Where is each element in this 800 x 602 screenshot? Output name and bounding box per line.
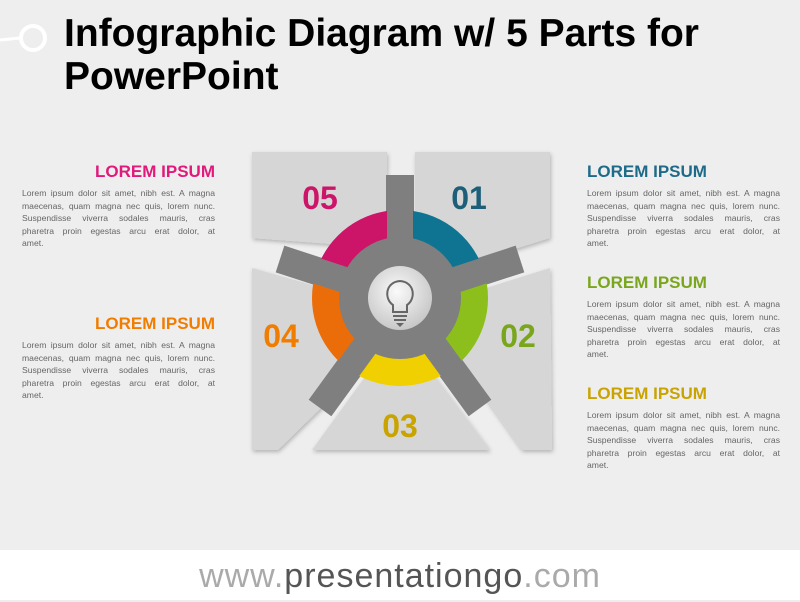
text block: 05: Lorem ipsum dolor sit amet, nibh est. A magna: [22, 188, 215, 198]
footer: www.presentationgo.com: [199, 557, 601, 595]
spokes over ring: [305, 200, 495, 379]
text block: 03: maecenas, quam magna nec quis, lorem nunc.: [587, 423, 780, 433]
text block: 01: Suspendisse viverra sodales mauris, cras: [587, 213, 780, 223]
text block: 05: LOREM IPSUM: [95, 162, 215, 181]
numbers: 05: [302, 180, 338, 216]
text block: 02: Suspendisse viverra sodales mauris, cras: [587, 324, 780, 334]
title: [0, 12, 699, 98]
text block: 05: [22, 162, 215, 248]
text block: 04: maecenas, quam magna nec quis, lorem nunc.: [22, 353, 215, 363]
text block: 03: Lorem ipsum dolor sit amet, nibh est. A magna: [587, 410, 780, 420]
title: Infographic Diagram w/ 5 Parts for: [64, 12, 699, 55]
text block: 02: Lorem ipsum dolor sit amet, nibh est. A magna: [587, 299, 780, 309]
numbers: 02: [500, 318, 536, 354]
text block: 05: maecenas, quam magna nec quis, lorem nunc.: [22, 201, 215, 211]
text block: 02: maecenas, quam magna nec quis, lorem nunc.: [587, 312, 780, 322]
numbers: [263, 180, 536, 444]
text block: 03: Suspendisse viverra sodales mauris, cras: [587, 435, 780, 445]
text block: 04: pharetra proin egestas arcu erat dolor, at: [22, 378, 215, 388]
text block: 05: Suspendisse viverra sodales mauris, cras: [22, 213, 215, 223]
text block: 04: amet.: [22, 390, 44, 400]
text block: 04: LOREM IPSUM: [95, 314, 215, 333]
text block: 04: [22, 314, 215, 400]
numbers: 04: [263, 318, 299, 354]
text block: 02: LOREM IPSUM: [587, 273, 707, 292]
panels: [252, 152, 552, 450]
text block: 02: amet.: [587, 349, 608, 359]
text block: 01: pharetra proin egestas arcu erat dolor, at: [587, 226, 780, 236]
text block: 01: [587, 162, 780, 248]
text block: 01: Lorem ipsum dolor sit amet, nibh est. A magna: [587, 188, 780, 198]
text block: 01: amet.: [587, 238, 608, 248]
title: PowerPoint: [64, 55, 279, 98]
text block: 02: [587, 273, 780, 359]
text block: 01: maecenas, quam magna nec quis, lorem nunc.: [587, 201, 780, 211]
text block: 03: [587, 384, 780, 470]
text block: 05: pharetra proin egestas arcu erat dolor, at: [22, 226, 215, 236]
text block: 05: amet.: [22, 238, 44, 248]
text block: 03: LOREM IPSUM: [587, 384, 707, 403]
text block: 01: LOREM IPSUM: [587, 162, 707, 181]
text block: 03: pharetra proin egestas arcu erat dolor, at: [587, 448, 780, 458]
icon: light bulb: [368, 266, 432, 330]
footer: [0, 550, 800, 600]
spokes and hub: [280, 175, 520, 408]
numbers: 01: [451, 180, 487, 216]
colored ring segments: [312, 210, 488, 386]
icon: title ring: [0, 24, 47, 52]
numbers: 03: [382, 408, 418, 444]
text block: 03: amet.: [587, 460, 608, 470]
text block: 04: Lorem ipsum dolor sit amet, nibh est. A magna: [22, 340, 215, 350]
text block: 02: pharetra proin egestas arcu erat dolor, at: [587, 337, 780, 347]
text block: 04: Suspendisse viverra sodales mauris, cras: [22, 365, 215, 375]
